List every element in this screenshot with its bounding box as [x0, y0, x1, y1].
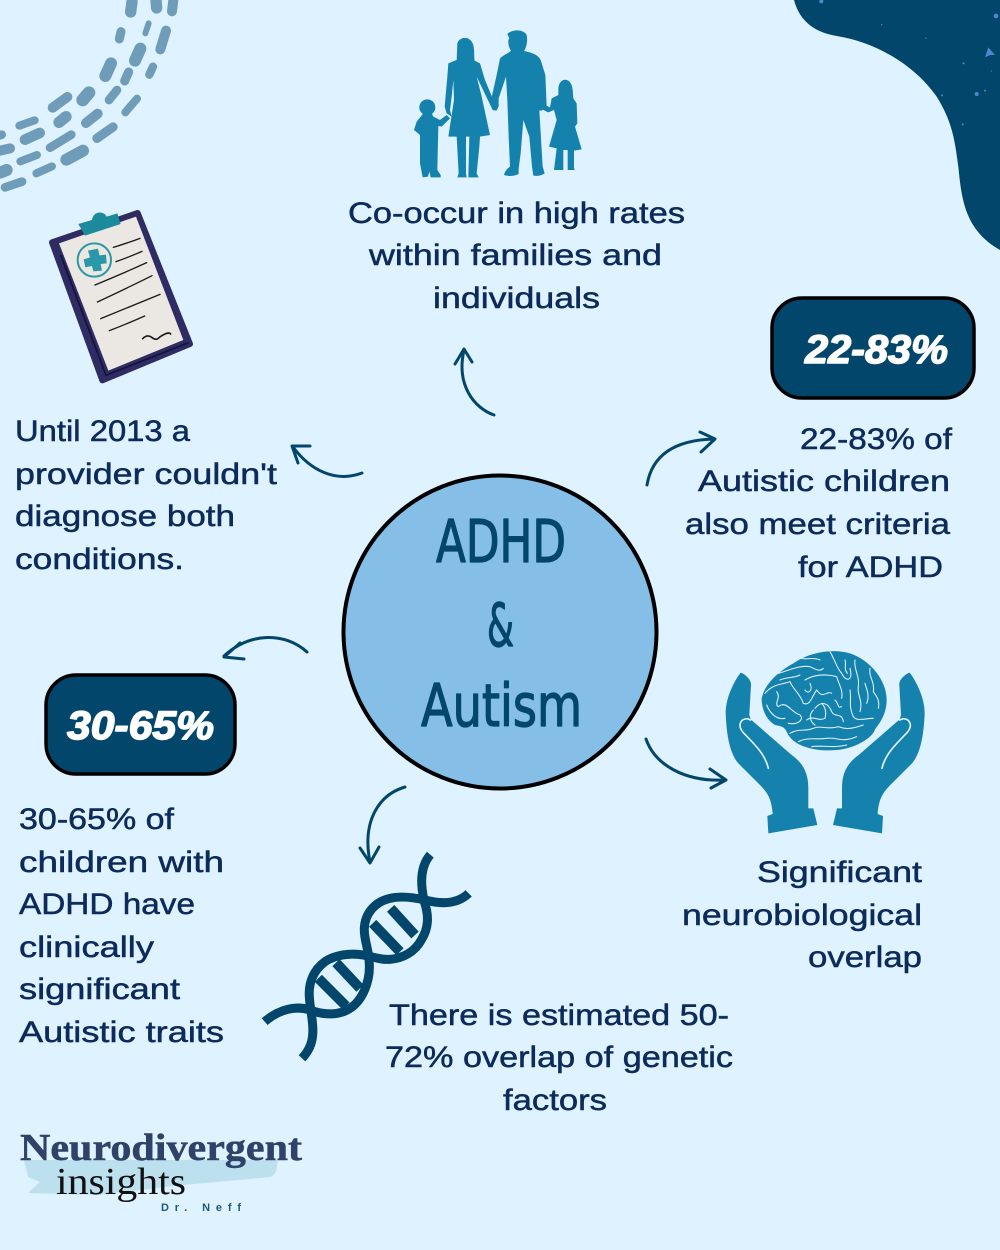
- badge: 30-65%: [46, 675, 235, 774]
- icon: DNA helix: [265, 855, 469, 1058]
- text: families: individuals: [433, 282, 600, 315]
- arrow: to brain: [646, 739, 726, 788]
- badge: 22-83%: 22-83%: [804, 328, 948, 372]
- text: 22-83% statistic: Autistic children: [698, 465, 950, 498]
- text: 30-65% statistic: Autistic traits: [19, 1016, 224, 1049]
- central circle: ADHD & Autism: Autism: [421, 671, 582, 740]
- text: 30-65% statistic: ADHD have: [19, 888, 195, 921]
- logo: Neurodivergent insights: Neurodivergent: [20, 1127, 302, 1169]
- text: diagnosis history: conditions.: [15, 543, 184, 576]
- text: 30-65% statistic: [19, 803, 224, 1049]
- arrow: to 30-65%: [224, 637, 307, 659]
- text: 30-65% statistic: 30-65% of: [19, 803, 175, 836]
- central circle: ADHD & Autism: [344, 476, 656, 788]
- arrow: to families: [455, 349, 494, 415]
- badge: 30-65%: 30-65%: [67, 704, 214, 748]
- text: diagnosis history: [15, 415, 278, 576]
- text: 30-65% statistic: significant: [19, 973, 181, 1006]
- arrow: to 22-83%: [647, 432, 715, 485]
- decorative dark blob top right: [794, 0, 1000, 250]
- text: diagnosis history: provider couldn't: [15, 458, 278, 491]
- text: families: [348, 197, 685, 315]
- text: neurobiological overlap: overlap: [808, 941, 922, 974]
- text: genetic overlap: [385, 999, 733, 1117]
- logo: Neurodivergent insights: Dr. Neff: [161, 1202, 241, 1214]
- text: 30-65% statistic: children with: [19, 846, 224, 879]
- text: 30-65% statistic: clinically: [19, 931, 154, 964]
- text: diagnosis history: diagnose both: [15, 500, 235, 533]
- text: 22-83% statistic: [685, 423, 953, 584]
- text: neurobiological overlap: [682, 856, 923, 974]
- text: genetic overlap: 72% overlap of genetic: [385, 1041, 733, 1074]
- text: genetic overlap: factors: [503, 1084, 607, 1117]
- arrow: to clipboard: [292, 446, 362, 476]
- icon: family silhouette: [414, 30, 582, 177]
- text: genetic overlap: There is estimated 50-: [389, 999, 729, 1032]
- arrow: to DNA: [360, 787, 405, 863]
- text: 22-83% statistic: also meet criteria: [685, 508, 950, 541]
- text: 22-83% statistic: for ADHD: [798, 551, 943, 584]
- text: neurobiological overlap: neurobiological: [682, 899, 922, 932]
- text: neurobiological overlap: Significant: [757, 856, 923, 889]
- decorative dashes top left: [0, 0, 173, 187]
- logo: Neurodivergent insights: [20, 1127, 302, 1214]
- text: families: within families and: [368, 239, 662, 272]
- icon: medical clipboard: [52, 213, 190, 380]
- text: 22-83% statistic: 22-83% of: [800, 423, 953, 456]
- central circle: ADHD & Autism: &: [487, 591, 514, 661]
- badge: 22-83%: [772, 298, 974, 398]
- icon: hands holding brain: [726, 651, 925, 833]
- central circle: ADHD & Autism: ADHD: [436, 507, 566, 576]
- text: families: Co-occur in high rates: [348, 197, 685, 230]
- logo: Neurodivergent insights: insights: [56, 1161, 186, 1203]
- text: diagnosis history: Until 2013 a: [15, 415, 190, 448]
